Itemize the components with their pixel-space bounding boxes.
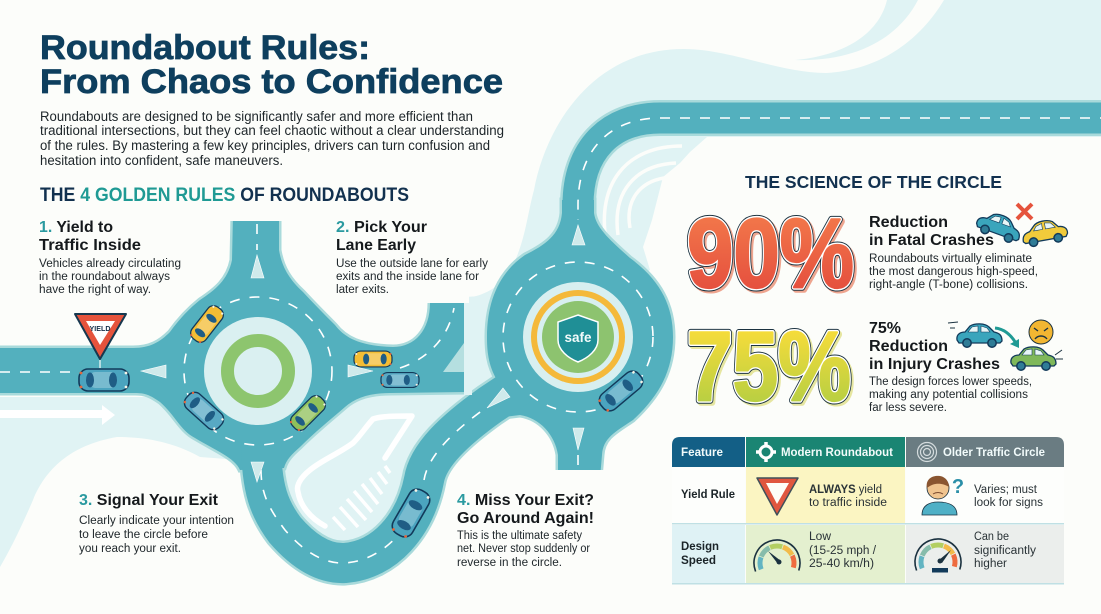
icon: slowing cars and face (948, 320, 1063, 370)
icon: confused person (922, 476, 964, 515)
icon: crash cars (974, 204, 1069, 248)
road end masks (225, 210, 608, 482)
table header: Modern Roundabout (781, 445, 893, 459)
table header: Feature (681, 445, 723, 459)
stat heading: in Fatal Crashes (869, 232, 994, 249)
stat: 90 percent (687, 198, 1069, 310)
stat: 90 percent: 90% (687, 198, 854, 308)
rule 4: This is the ultimate safety (457, 530, 582, 542)
row: design speed: Can be (974, 531, 1009, 543)
row: yield rule: to traffic inside (809, 497, 887, 509)
rule 3: 3. Signal Your Exit (79, 492, 219, 509)
intro paragraph: Roundabouts are designed to be significantly safer and more efficient than (40, 109, 473, 124)
rule 4: reverse in the circle. (457, 557, 562, 569)
icon: confused person: ? (952, 476, 964, 498)
stat: 90 percent: 90% (687, 198, 854, 308)
arrow: white flow arrow (0, 405, 115, 425)
cars on the roads (79, 303, 646, 540)
intro paragraph: hesitation into confident, safe maneuvers. (40, 153, 283, 168)
icon: yield sign (75, 314, 126, 368)
stat heading: in Injury Crashes (869, 356, 1000, 373)
stat: 75 percent (687, 311, 1063, 423)
splitter island markings (298, 416, 412, 530)
title (40, 29, 503, 101)
icon: low speed gauge (748, 534, 806, 592)
roundabout 2 safe island (523, 282, 633, 392)
decorative arcs under the upper road (604, 146, 682, 240)
row: design speed: significantly (974, 545, 1036, 557)
stat description: making any potential collisions (869, 389, 1028, 401)
stat: 75 percent: 75% (687, 311, 851, 421)
rule 4 (457, 492, 594, 569)
stat heading: Reduction (869, 214, 948, 231)
rule 4: Go Around Again! (457, 510, 594, 527)
stat heading (869, 320, 1000, 373)
icon: older traffic circle (918, 442, 936, 462)
row: design speed: 25-40 km/h) (809, 558, 874, 570)
stat heading: 75% (869, 320, 901, 337)
table header: Older Traffic Circle (943, 445, 1045, 459)
rule 2: 2. Pick Your (336, 219, 427, 236)
row: design speed: (15-25 mph / (809, 545, 877, 557)
stat: 75 percent: 75% (689, 313, 853, 423)
stat heading: Reduction (869, 338, 948, 355)
table header (672, 437, 1064, 467)
rule 4: net. Never stop suddenly or (457, 543, 590, 555)
stat: 75 percent: 75% (687, 311, 851, 421)
row: yield rule: Varies; must (974, 484, 1038, 496)
icon: yield sign: YIELD (90, 324, 111, 333)
stat description: far less severe. (869, 402, 947, 414)
stat: 90 percent: 90% (689, 200, 856, 310)
rule 4: 4. Miss Your Exit? (457, 492, 594, 509)
rule 3: to leave the circle before (79, 529, 208, 541)
row: yield rule: ALWAYS yield (809, 484, 882, 496)
stat description: The design forces lower speeds, (869, 376, 1032, 388)
rule 2: exits and the inside lane for (336, 271, 479, 283)
row: design speed: Low (809, 531, 832, 543)
rule 2: later exits. (336, 284, 389, 296)
rule 2: Use the outside lane for early (336, 258, 488, 270)
shield label: safe (564, 330, 592, 345)
intro paragraph: of the rules. By mastering a few key principles, drivers can turn confusion and (40, 138, 490, 153)
rule 2: Lane Early (336, 237, 416, 254)
rule 3: you reach your exit. (79, 543, 181, 555)
icon: high speed gauge (909, 533, 967, 591)
icon: modern roundabout (756, 442, 776, 462)
comparison table (672, 437, 1064, 592)
roundabout 1 centre island (204, 317, 312, 425)
title: Roundabout Rules: (40, 29, 370, 67)
stat: 90 percent: 90% (687, 198, 854, 308)
rule 1 (39, 219, 181, 296)
rule 2 (336, 219, 488, 296)
row: design speed: Design (681, 541, 719, 553)
rule 1: 1. Yield to (39, 219, 113, 236)
rule 1: Traffic Inside (39, 237, 141, 254)
row: design speed: Speed (681, 555, 716, 567)
rule 1: in the roundabout always (39, 271, 170, 283)
heading: science of the circle: THE SCIENCE OF THE CIRCLE (745, 172, 1002, 192)
icon: safe shield (558, 315, 598, 362)
row: yield rule (672, 467, 1064, 524)
row: design speed (672, 525, 1064, 592)
rule 1: Vehicles already circulating (39, 258, 181, 270)
stat description (869, 376, 1032, 414)
intro paragraph: traditional intersections, but they can feel chaotic without a clear understanding (40, 123, 504, 138)
stat description: the most dangerous high-speed, (869, 266, 1038, 278)
rule 1: have the right of way. (39, 284, 151, 296)
stat description (869, 253, 1038, 291)
intro paragraph (40, 109, 504, 168)
heading: 4 golden rules: THE 4 GOLDEN RULES OF ROUNDABOUTS (40, 185, 409, 206)
rule 3 (79, 492, 234, 555)
row: yield rule: Yield Rule (681, 489, 735, 501)
rule 3: Clearly indicate your intention (79, 515, 234, 527)
row: design speed: higher (974, 558, 1007, 570)
stat: 75 percent: 75% (687, 311, 851, 421)
road network (0, 118, 1101, 563)
title: From Chaos to Confidence (40, 63, 503, 101)
stat description: right-angle (T-bone) collisions. (869, 279, 1028, 291)
stat heading (869, 214, 994, 249)
icon: yield triangle (757, 478, 798, 515)
stat description: Roundabouts virtually eliminate (869, 253, 1032, 265)
row: yield rule: look for signs (974, 497, 1043, 509)
